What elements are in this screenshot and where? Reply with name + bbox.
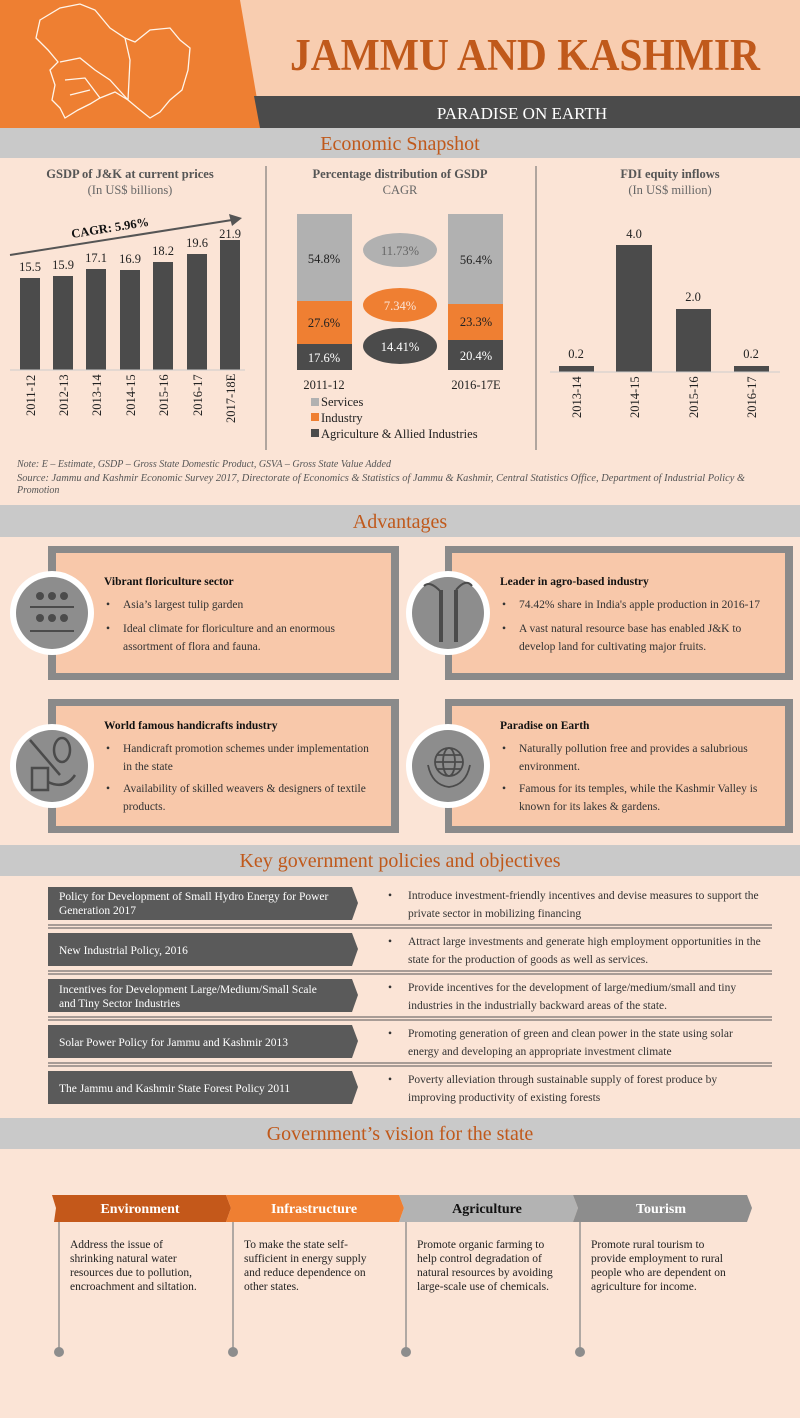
notes and source: Promotion xyxy=(16,485,59,496)
chart: percentage distribution of GSDP: Services xyxy=(321,395,363,409)
vision timeline: Address the issue of xyxy=(70,1239,163,1251)
chart: percentage distribution of GSDP: 11.73% xyxy=(381,244,419,258)
chart: FDI equity inflows: 2016-17 xyxy=(745,376,759,418)
section heading: Economic Snapshot: Economic Snapshot xyxy=(320,133,480,155)
panel: handicrafts: World famous handicrafts industry xyxy=(104,720,278,732)
chart: GSDP bar chart: 2012-13 xyxy=(57,374,71,416)
policies table: Generation 2017 xyxy=(59,905,136,917)
chart: GSDP bar chart: GSDP of J&K at current prices xyxy=(46,167,214,181)
chart: FDI equity inflows: 2.0 xyxy=(685,290,701,304)
policies table: and Tiny Sector Industries xyxy=(59,998,181,1010)
vision timeline: sufficient in energy supply xyxy=(244,1253,367,1265)
panel: floriculture: assortment of flora and fauna. xyxy=(123,641,261,653)
panel: paradise on earth: • xyxy=(502,783,506,795)
chart: percentage distribution of GSDP: Industry xyxy=(321,411,363,425)
panel: agro-based industry: 74.42% share in India's apple production in 2016-17 xyxy=(519,599,760,611)
panel: paradise on earth xyxy=(406,699,793,833)
chart: percentage distribution of GSDP: CAGR xyxy=(383,183,418,197)
chart: percentage distribution of GSDP: 20.4% xyxy=(460,349,492,363)
vision timeline: To make the state self- xyxy=(244,1239,348,1251)
chart: GSDP bar chart: 2014-15 xyxy=(124,374,138,416)
chart: FDI equity inflows: 2015-16 xyxy=(687,376,701,418)
panel: floriculture xyxy=(10,546,399,680)
chart: GSDP bar chart: 16.9 xyxy=(119,252,141,266)
chart: FDI equity inflows: (In US$ million) xyxy=(628,183,712,197)
panel: handicrafts: products. xyxy=(123,801,166,813)
chart: GSDP bar chart: 2017-18E xyxy=(224,373,238,423)
panel: paradise on earth: Paradise on Earth xyxy=(500,720,590,732)
chart: percentage distribution of GSDP: 54.8% xyxy=(308,252,340,266)
panel: handicrafts: in the state xyxy=(123,761,173,773)
policies table: private sector in mobilizing financing xyxy=(408,908,581,920)
panel: agro-based industry: Leader in agro-based industry xyxy=(500,576,649,588)
chart: percentage distribution of GSDP: 14.41% xyxy=(381,340,419,354)
chart: GSDP bar chart: 2011-12 xyxy=(24,375,38,416)
chart: GSDP bar chart: 17.1 xyxy=(85,251,107,265)
notes and source: Note: E – Estimate, GSDP – Gross State Domestic Product, GSVA – Gross State Value Added xyxy=(16,459,392,470)
chart: GSDP bar chart: 15.5 xyxy=(19,260,41,274)
panel: agro-based industry: • xyxy=(502,623,506,635)
policies table: industries in the industrially backward areas of the state. xyxy=(408,1000,667,1012)
panel: paradise on earth: environment. xyxy=(519,761,580,773)
chart: FDI equity inflows: 2013-14 xyxy=(570,376,584,418)
vision timeline: agriculture for income. xyxy=(591,1281,697,1293)
vision timeline: Agriculture xyxy=(452,1202,522,1217)
panel: paradise on earth: Famous for its temples, while the Kashmir Valley is xyxy=(519,783,758,795)
chart: GSDP bar chart: 19.6 xyxy=(186,236,208,250)
policies table: New Industrial Policy, 2016 xyxy=(59,945,188,957)
policies table: • xyxy=(388,1074,392,1086)
chart: GSDP bar chart: 15.9 xyxy=(52,258,74,272)
chart: GSDP bar chart: CAGR: 5.96% xyxy=(70,215,150,241)
policies table: • xyxy=(388,982,392,994)
subtitle bar xyxy=(254,96,800,128)
chart: GSDP bar chart: 21.9 xyxy=(219,227,241,241)
chart: FDI equity inflows: 2014-15 xyxy=(628,376,642,418)
policies table: • xyxy=(388,890,392,902)
notes and source xyxy=(16,459,745,496)
chart: GSDP bar chart: 2016-17 xyxy=(191,374,205,416)
vision timeline xyxy=(52,1195,752,1357)
policies table: energy and developing an appropriate investment climate xyxy=(408,1046,672,1058)
panel: handicrafts: • xyxy=(106,743,110,755)
vision timeline: people who are dependent on xyxy=(591,1267,726,1279)
panel: floriculture: • xyxy=(106,599,110,611)
section heading: Economic Snapshot xyxy=(0,128,800,158)
chart: FDI equity inflows: 0.2 xyxy=(743,347,759,361)
icon: globe xyxy=(428,748,470,787)
policies table: Introduce investment-friendly incentives and devise measures to support the xyxy=(408,890,759,902)
header background xyxy=(0,0,800,128)
vision timeline: Infrastructure xyxy=(271,1202,357,1217)
vision timeline: Tourism xyxy=(636,1202,686,1217)
vision timeline: large-scale use of chemicals. xyxy=(417,1281,549,1293)
panel: floriculture: Ideal climate for floriculture and an enormous xyxy=(123,623,336,635)
policies table: Provide incentives for the development of large/medium/small and tiny xyxy=(408,982,736,994)
policies table: Policy for Development of Small Hydro Energy for Power xyxy=(59,891,329,903)
chart: FDI equity inflows: FDI equity inflows xyxy=(620,167,720,181)
section heading: Advantages: Advantages xyxy=(353,511,447,533)
chart: percentage distribution of GSDP: Percentage distribution of GSDP xyxy=(312,167,488,181)
icon: map of J&K xyxy=(36,4,190,118)
policies table: Promoting generation of green and clean power in the state using solar xyxy=(408,1028,733,1040)
chart: FDI equity inflows: 0.2 xyxy=(568,347,584,361)
policies table: Solar Power Policy for Jammu and Kashmir 2013 xyxy=(59,1037,288,1049)
chart: GSDP bar chart: 2015-16 xyxy=(157,374,171,416)
vision timeline: Promote rural tourism to xyxy=(591,1239,705,1251)
section heading: Government's vision xyxy=(0,1118,800,1149)
notes and source: Source: Jammu and Kashmir Economic Survey 2017, Directorate of Economics & Statistics of Jammu & Kashmir, Central Statistics Office, Department of Industrial Policy & xyxy=(17,473,745,484)
policies table: Poverty alleviation through sustainable supply of forest produce by xyxy=(408,1074,717,1086)
vision timeline: resources due to pollution, xyxy=(70,1267,192,1279)
chart: GSDP bar chart xyxy=(10,167,245,423)
section heading: Advantages xyxy=(0,505,800,537)
panel: handicrafts: Handicraft promotion schemes under implementation xyxy=(123,743,369,755)
panel: agro-based industry xyxy=(406,546,793,680)
chart: percentage distribution of GSDP: 2011-12 xyxy=(303,378,345,392)
chart: percentage distribution of GSDP: 56.4% xyxy=(460,253,492,267)
policies table: • xyxy=(388,1028,392,1040)
chart: percentage distribution of GSDP: 17.6% xyxy=(308,351,340,365)
chart: FDI equity inflows: 4.0 xyxy=(626,227,642,241)
panel: handicrafts: Availability of skilled weavers & designers of textile xyxy=(123,783,366,795)
chart: percentage distribution of GSDP: 7.34% xyxy=(384,299,416,313)
chart: GSDP bar chart: 2013-14 xyxy=(90,374,104,416)
chart: percentage distribution of GSDP: Agriculture & Allied Industries xyxy=(321,427,478,441)
chart: FDI equity inflows xyxy=(550,167,780,418)
vision timeline: natural resources by avoiding xyxy=(417,1267,553,1279)
subtitle bar: PARADISE ON EARTH xyxy=(437,104,607,123)
icon: scissors and thread xyxy=(30,738,75,790)
policies table: Attract large investments and generate high employment opportunities in the xyxy=(408,936,761,948)
policies table: improving productivity of existing forests xyxy=(408,1092,601,1104)
vision timeline: help control degradation of xyxy=(417,1253,542,1265)
policies table: Incentives for Development Large/Medium/Small Scale xyxy=(59,984,317,996)
panel: floriculture: Asia’s largest tulip garden xyxy=(123,599,243,611)
section heading: Government's vision: Government’s vision for the state xyxy=(267,1123,533,1145)
vision timeline: Promote organic farming to xyxy=(417,1239,544,1251)
panel: paradise on earth: Naturally pollution free and provides a salubrious xyxy=(519,743,748,755)
policies table: state for the production of goods as well as services. xyxy=(408,954,648,966)
chart: GSDP bar chart: (In US$ billions) xyxy=(88,183,172,197)
panel: paradise on earth: • xyxy=(502,743,506,755)
panel: agro-based industry: develop land for cultivating major fruits. xyxy=(519,641,706,653)
vision timeline: encroachment and siltation. xyxy=(70,1281,197,1293)
chart: percentage distribution of GSDP xyxy=(297,167,503,441)
panel: handicrafts: • xyxy=(106,783,110,795)
vision timeline: provide employment to rural xyxy=(591,1253,723,1265)
chart: percentage distribution of GSDP: 2016-17E xyxy=(451,378,501,392)
chart: GSDP bar chart: 18.2 xyxy=(152,244,174,258)
vision timeline: shrinking natural water xyxy=(70,1253,177,1265)
section heading: Key government policies xyxy=(0,845,800,876)
section heading: Key government policies: Key government policies and objectives xyxy=(239,850,561,872)
vision timeline: other states. xyxy=(244,1281,299,1293)
vision timeline: Environment xyxy=(100,1202,180,1217)
icon: sugarcane xyxy=(424,583,472,642)
panel: floriculture: • xyxy=(106,623,110,635)
vision timeline: and reduce dependence on xyxy=(244,1267,366,1279)
panel: agro-based industry: • xyxy=(502,599,506,611)
title: JAMMU AND KASHMIR xyxy=(290,30,760,80)
icon: flowers xyxy=(30,592,74,632)
chart: percentage distribution of GSDP: 23.3% xyxy=(460,315,492,329)
chart: percentage distribution of GSDP: 27.6% xyxy=(308,316,340,330)
panel: paradise on earth: known for its lakes & gardens. xyxy=(519,801,660,813)
panel: agro-based industry: A vast natural resource base has enabled J&K to xyxy=(519,623,742,635)
policies table: The Jammu and Kashmir State Forest Policy 2011 xyxy=(59,1083,290,1095)
panel: floriculture: Vibrant floriculture sector xyxy=(104,576,234,588)
policies table: • xyxy=(388,936,392,948)
policies table xyxy=(48,887,772,1104)
panel: handicrafts xyxy=(10,699,399,833)
